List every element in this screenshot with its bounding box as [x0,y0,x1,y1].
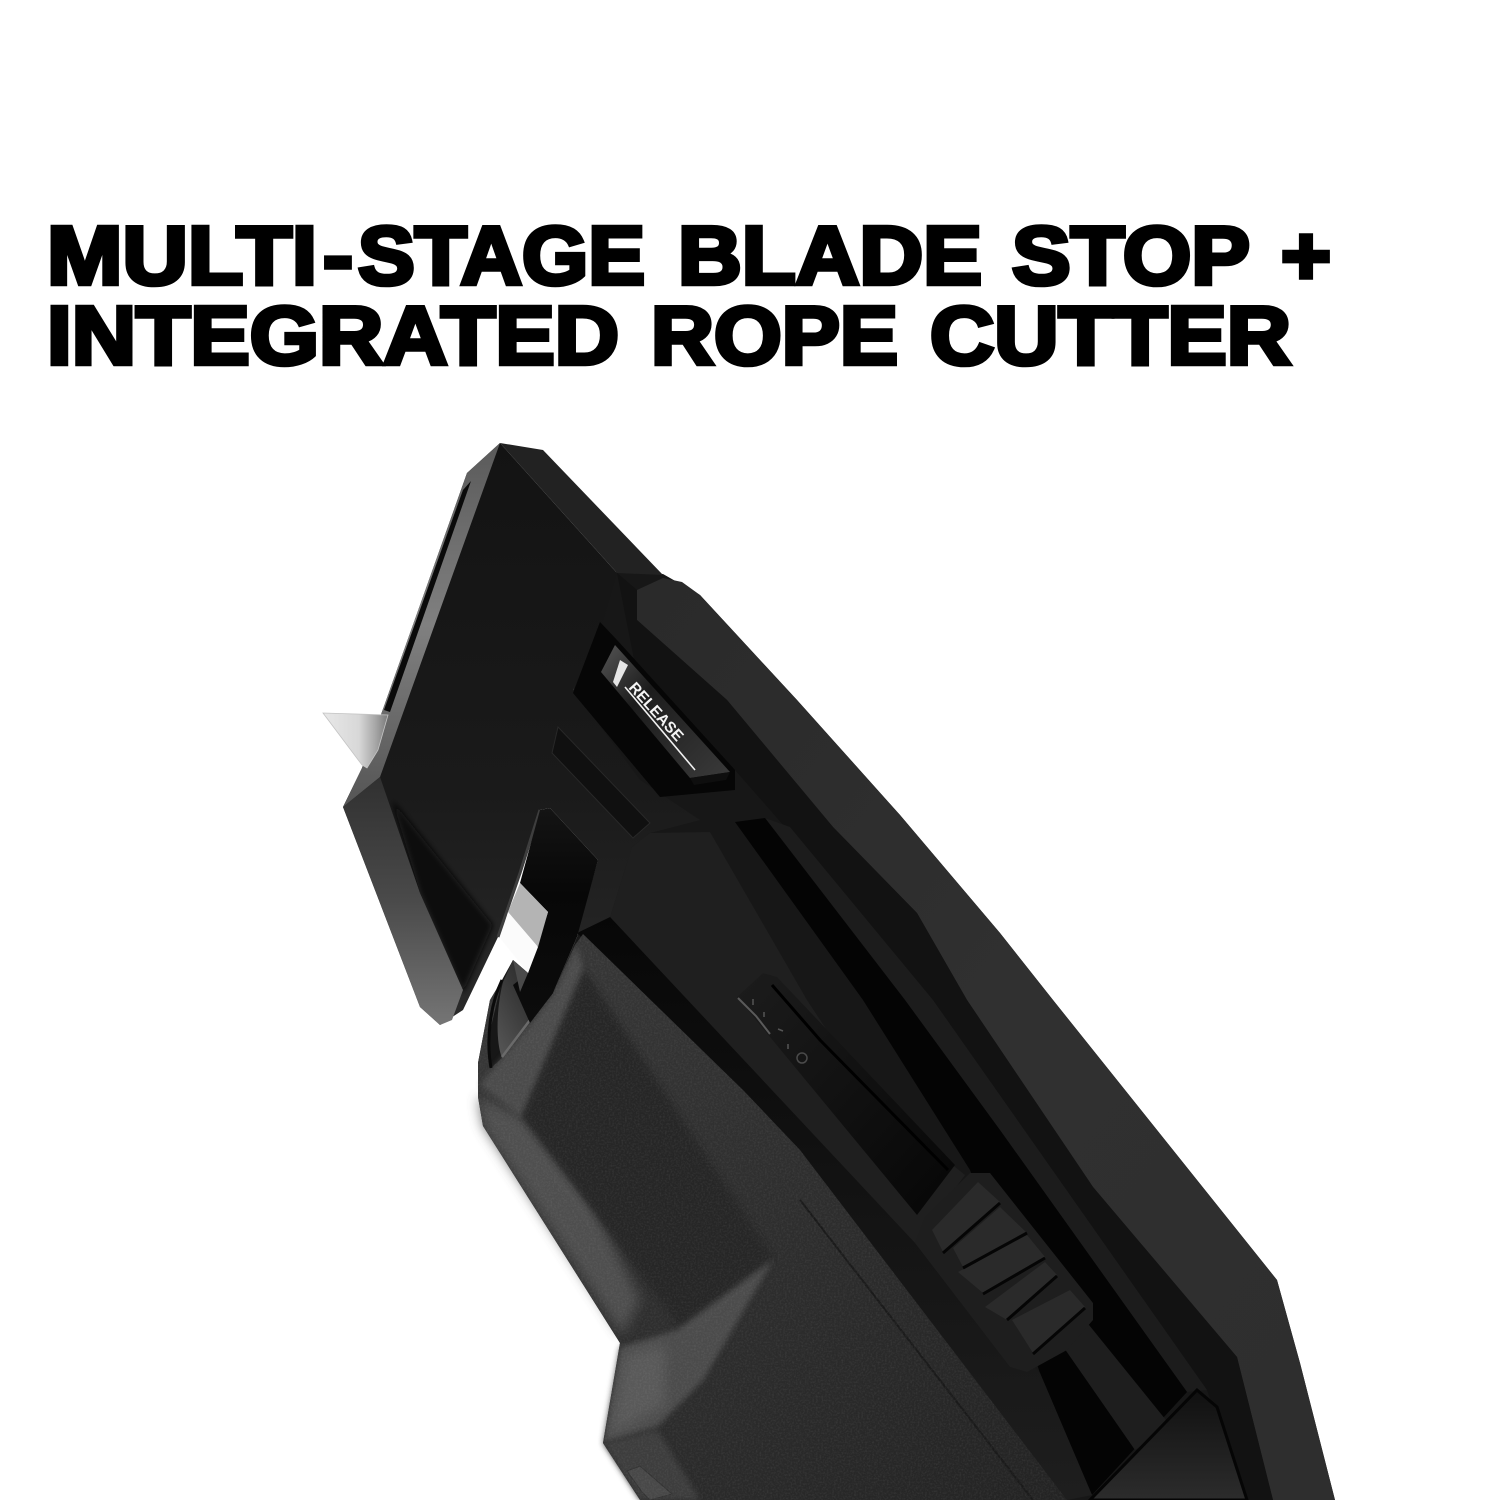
title [47,209,1331,382]
release button: RELEASE [625,679,687,745]
top bevel [500,443,663,575]
round recess by rope cutter [489,960,553,1068]
grip foot facet [603,1430,700,1500]
title line 2: INTEGRATED [47,289,619,382]
title line 1: - [323,209,353,302]
title line 2 [47,289,1291,382]
black channel [735,818,1187,1495]
face panel [610,832,965,1243]
title line 1: MULTI [47,209,317,302]
product photo: utility knife [323,443,1335,1500]
slider thumb [915,1173,1093,1372]
lower bevel [343,777,463,1025]
grip side highlight [478,1097,640,1335]
seam strip between panel and grip [577,917,1092,1500]
release button pocket [573,622,735,797]
shadow band [392,800,493,993]
texture grain [478,934,1067,1500]
small label plate [627,1466,672,1500]
rail below slider [1062,1320,1170,1450]
front foot of handle [1090,1390,1247,1500]
grip upper highlight [480,945,583,1117]
grip lower highlight [603,1260,773,1443]
grip recess [522,970,773,1327]
textured spine [637,578,1335,1500]
handle logo slot [737,973,955,1215]
notch rim [498,810,540,937]
title line 1: STAGE [358,209,645,302]
dark spine band [617,573,1273,1500]
knife body silhouette [478,570,1335,1500]
moulded ridge [552,727,650,838]
left silver bevel [343,443,500,807]
title line 2: CUTTER [930,289,1291,382]
title line 1: STOP [1012,209,1250,302]
title line 2: ROPE [651,289,898,382]
blade head face [343,443,700,1025]
title line 1: BLADE [678,209,982,302]
grip inner seam [800,1200,1033,1500]
release button [601,645,730,785]
slider ridges [932,1182,1085,1353]
utility blade tip [323,713,388,768]
grip [478,934,1067,1500]
title line 1: + [1281,209,1331,302]
rope cutter blade [500,883,548,992]
title line 1 [47,209,1331,302]
blade slit [384,481,471,712]
upper rail [765,818,1207,1392]
rope cutter window [513,808,598,1023]
grip lower brightest facet [610,1345,665,1435]
